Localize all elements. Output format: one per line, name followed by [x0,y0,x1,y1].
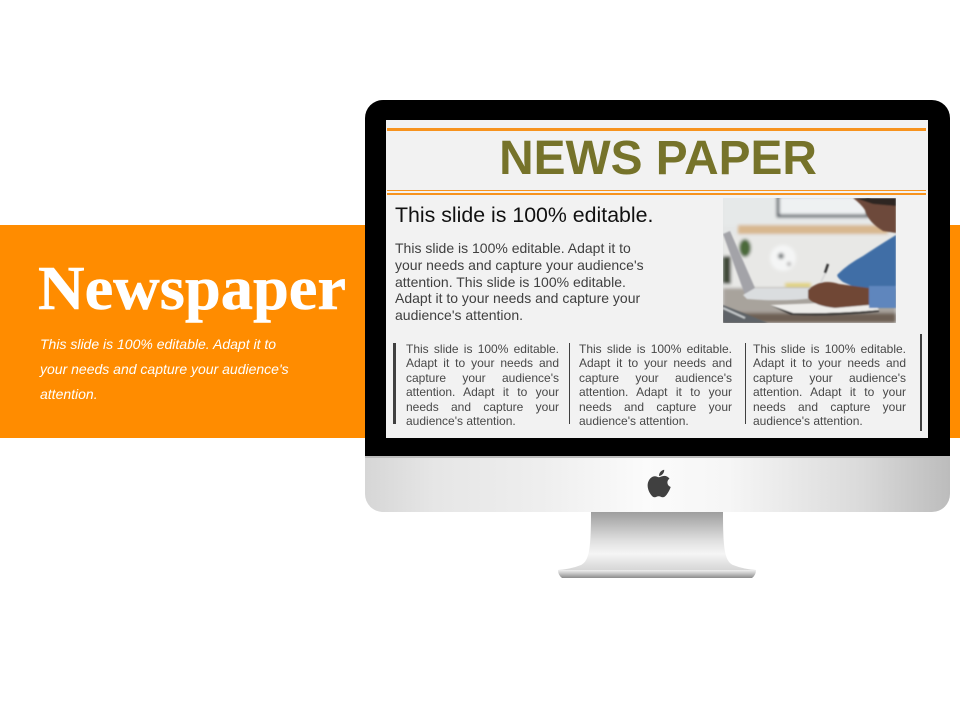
article body text: This slide is 100% editable. Adapt it to [395,240,631,256]
banner description text: This slide is 100% editable. Adapt it to [40,336,276,352]
masthead: NEWS PAPER: NEWS PAPER [499,132,817,185]
column 1 text: attention. Adapt it to your [406,385,559,399]
headline: This slide is 100% editable. [395,203,653,227]
heading: Newspaper: Newspaper [38,255,346,323]
article body text: Adapt it to your needs and capture your [395,290,640,306]
column 3 text: Adapt it to your needs and [753,356,906,370]
photo: man writing at laptop [723,198,896,323]
column 2 text: capture your audience's [579,371,732,385]
banner description text: your needs and capture your audience's [40,361,289,377]
column 2 text: attention. Adapt it to your [579,385,732,399]
banner description text: attention. [40,386,98,402]
column 1 text: needs and capture your [406,400,559,414]
column 2 text: audience's attention. [579,414,689,428]
column divider 1 [569,343,570,424]
orange banner [0,225,960,438]
column 1 text: This slide is 100% editable. [406,342,559,356]
article body text [395,240,644,323]
column 2 text [579,342,732,428]
column 3 text: audience's attention. [753,414,863,428]
top orange rule [387,128,926,131]
column divider 2 [745,343,746,424]
article body text: audience's attention. [395,307,523,323]
column 1 text: capture your audience's [406,371,559,385]
icon: apple logo [648,470,671,498]
left column bar [393,343,396,424]
screen: newspaper page [386,120,928,438]
monitor chin [365,456,950,512]
column 3 text [753,342,906,428]
column 2 text: needs and capture your [579,400,732,414]
article body text: your needs and capture your audience's [395,257,644,273]
monitor bezel [365,100,950,456]
column 1 text: audience's attention. [406,414,516,428]
column 1 text: Adapt it to your needs and [406,356,559,370]
chin highlight line [365,456,950,458]
column 2 text: This slide is 100% editable. [579,342,732,356]
banner description text [39,336,289,402]
right column bar [920,334,922,431]
column 3 text: This slide is 100% editable. [753,342,906,356]
article body text: attention. This slide is 100% editable. [395,274,626,290]
monitor stand [558,512,756,578]
column 3 text: attention. Adapt it to your [753,385,906,399]
column 1 text [406,342,559,428]
column 3 text: capture your audience's [753,371,906,385]
double orange rule [387,190,926,197]
column 3 text: needs and capture your [753,400,906,414]
column 2 text: Adapt it to your needs and [579,356,732,370]
